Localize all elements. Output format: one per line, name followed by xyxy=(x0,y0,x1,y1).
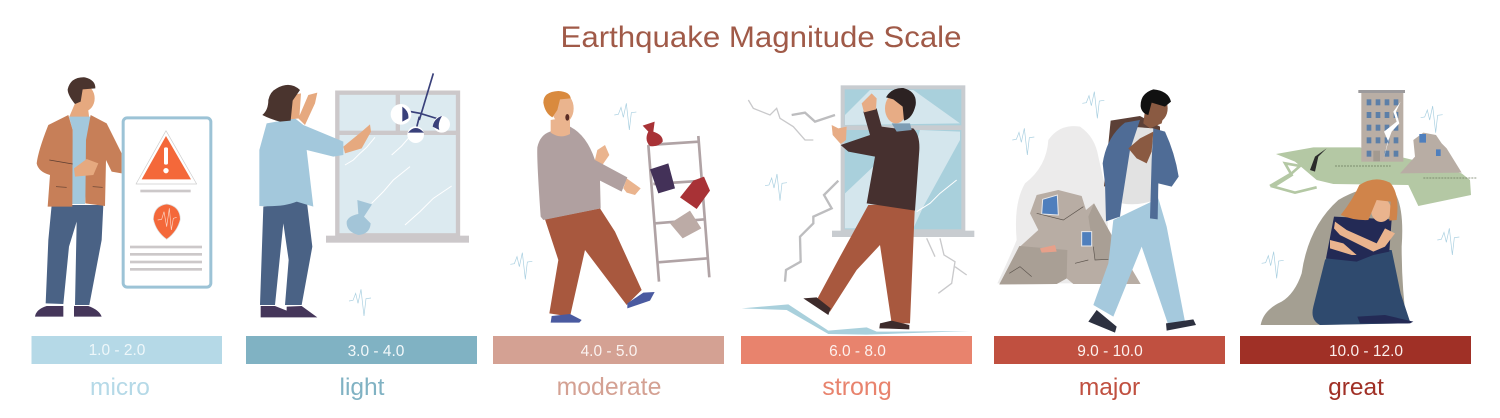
illustration: man at cracked window and wall xyxy=(742,87,974,335)
magnitude bar: 6.0 - 8.0 xyxy=(741,336,972,364)
panel: light xyxy=(246,73,477,401)
illustration: woman at shaking window xyxy=(259,73,469,317)
panel: strong xyxy=(741,87,974,401)
magnitude bar: 1.0 - 2.0: 1.0 - 2.0 xyxy=(89,342,146,359)
panel: major xyxy=(994,89,1225,401)
magnitude bar: 9.0 - 10.0: 9.0 - 10.0 xyxy=(1077,343,1143,360)
magnitude bar: 10.0 - 12.0: 10.0 - 12.0 xyxy=(1329,343,1403,360)
magnitude bar: 4.0 - 5.0: 4.0 - 5.0 xyxy=(581,343,638,360)
illustration: man walking past rubble xyxy=(997,89,1196,333)
magnitude bar: 6.0 - 8.0: 6.0 - 8.0 xyxy=(829,343,886,360)
illustration: man and falling bookshelf xyxy=(510,91,710,323)
label: strong: strong xyxy=(822,373,892,401)
illustration: man with phone alert xyxy=(35,77,211,317)
label: great: great xyxy=(1328,374,1384,401)
label: major: major xyxy=(1079,374,1140,401)
magnitude bar: 10.0 - 12.0 xyxy=(1240,336,1471,364)
label: micro: micro xyxy=(90,374,150,401)
panel: micro xyxy=(32,77,222,401)
magnitude bar: 3.0 - 4.0: 3.0 - 4.0 xyxy=(348,343,405,360)
magnitude bar: 1.0 - 2.0 xyxy=(32,336,222,364)
label: moderate: moderate xyxy=(557,374,661,401)
title: Earthquake Magnitude Scale xyxy=(560,21,962,54)
magnitude bar: 4.0 - 5.0 xyxy=(493,336,724,364)
panel: moderate xyxy=(493,91,724,401)
magnitude bar: 3.0 - 4.0 xyxy=(246,336,477,364)
label: light: light xyxy=(340,374,385,401)
icon: phone alert screen xyxy=(123,118,211,287)
magnitude bar: 9.0 - 10.0 xyxy=(994,336,1225,364)
panel: great xyxy=(1240,90,1477,401)
illustration: woman under blanket with collapsing city xyxy=(1261,90,1477,325)
